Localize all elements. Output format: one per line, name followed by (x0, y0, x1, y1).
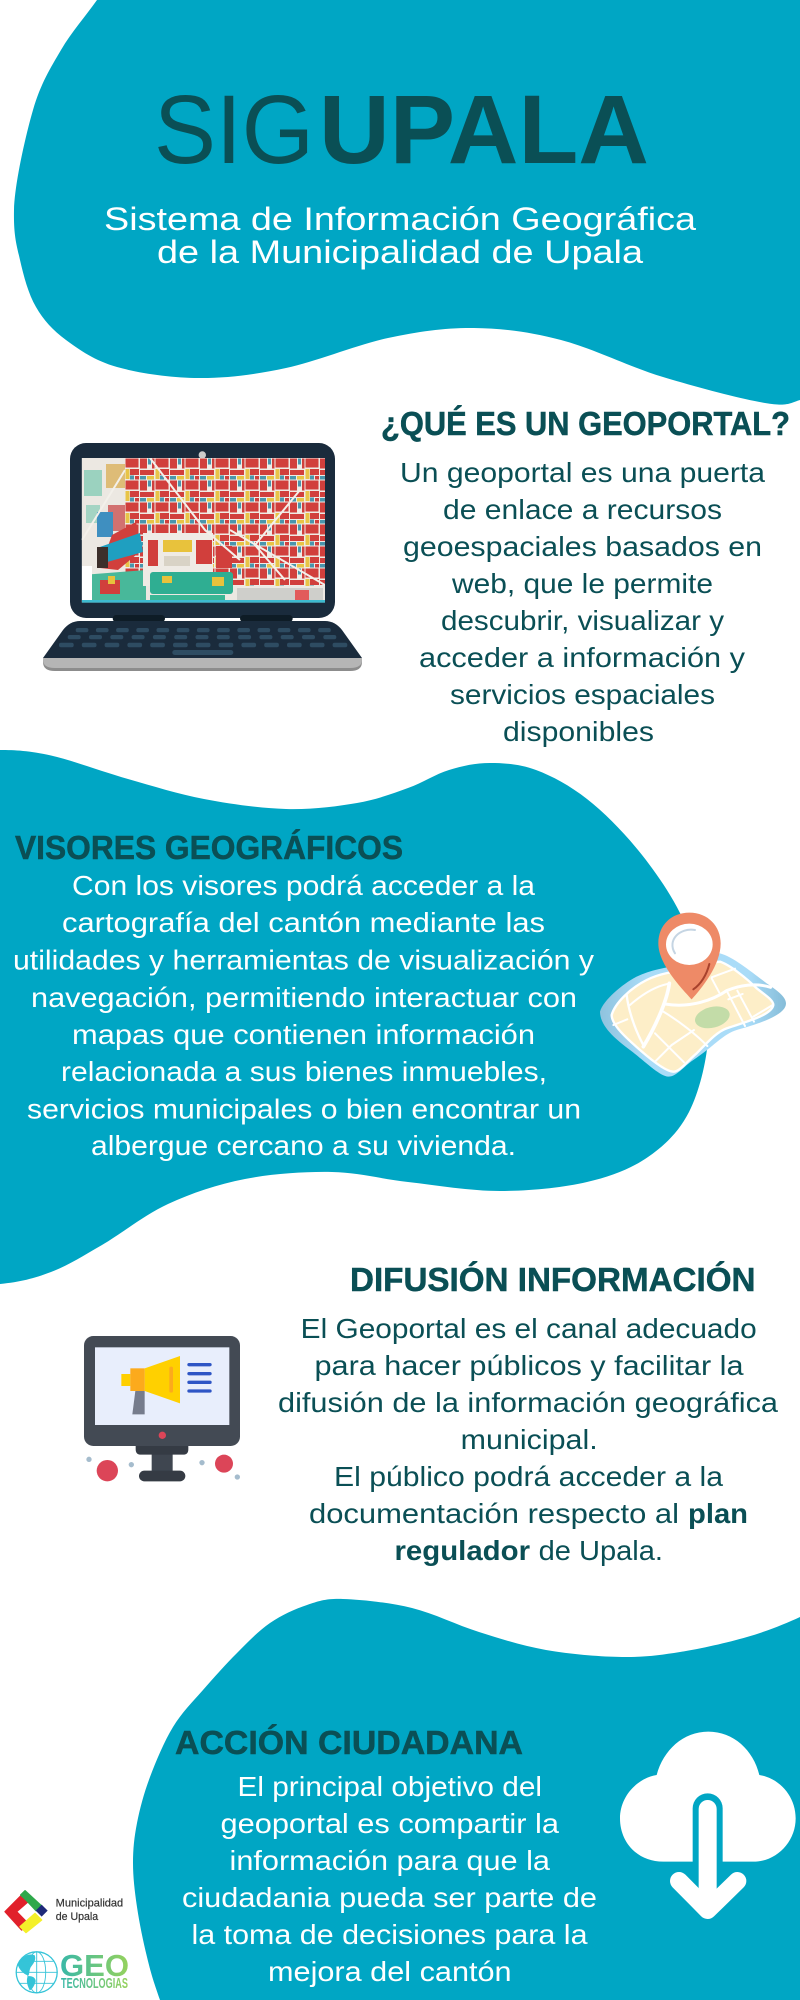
text block: difusion description: de Upala. (539, 1535, 663, 1566)
heading: accion ciudadana: ACCIÓN CIUDADANA (175, 1724, 523, 1761)
text block: difusion description: regulador (394, 1535, 530, 1566)
text block: geoportal definition: acceder a información y (419, 642, 745, 673)
logo: Geo Tecnologias: TECNOLOGIAS (61, 1975, 128, 1992)
icon: laptop with city map (43, 443, 362, 671)
logo: Municipalidad de Upala: Municipalidad (56, 1898, 123, 1910)
text block: accion description: la toma de decisiones para la (192, 1919, 588, 1950)
text block: geoportal definition: Un geoportal es una puerta (400, 457, 766, 488)
city map on screen (82, 458, 325, 603)
text block: accion description: información para que la (230, 1845, 551, 1876)
text block: difusion description: difusión de la información geográfica (278, 1387, 779, 1418)
title: SIG (154, 75, 314, 184)
text block: visores description: Con los visores podrá acceder a la (72, 870, 536, 901)
logo: Municipalidad de Upala: de Upala (56, 1911, 99, 1923)
text block: accion description (182, 1771, 597, 1987)
icon: cloud download (620, 1732, 796, 1910)
park (693, 1003, 732, 1032)
text block: visores description: servicios municipales o bien encontrar un (27, 1094, 581, 1124)
text block: difusion description: El Geoportal es el canal adecuado (301, 1313, 757, 1344)
panel: visores blob (0, 750, 708, 1284)
text block: visores description: albergue cercano a su vivienda. (91, 1130, 516, 1161)
text block: visores description: navegación, permitiendo interactuar con (31, 982, 577, 1013)
text block: visores description: utilidades y herramientas de visualización y (13, 944, 594, 976)
panel: accion ciudadana blob (133, 1599, 800, 2000)
text block: geoportal definition: servicios espaciales (450, 679, 715, 710)
icon: monitor with megaphone (84, 1336, 240, 1481)
text block: accion description: geoportal es compartir la (220, 1808, 560, 1839)
heading: visores geograficos: VISORES GEOGRÁFICOS (15, 829, 403, 866)
text block: geoportal definition: geoespaciales basados en (403, 531, 762, 562)
text block: geoportal definition: descubrir, visualizar y (441, 605, 724, 636)
text block: geoportal definition: web, que le permite (451, 568, 713, 599)
icon: map with location pin (600, 913, 786, 1077)
text block: geoportal definition: de enlace a recursos (443, 494, 722, 525)
text block: difusion description: plan (688, 1498, 748, 1529)
logo: Geo Tecnologias (16, 1948, 129, 1993)
globe (16, 1952, 57, 1993)
title: UPALA (319, 75, 649, 184)
panel: header blob (14, 0, 800, 405)
text block: difusion description: para hacer públicos y facilitar la (314, 1350, 744, 1381)
text block: difusion description (278, 1313, 779, 1566)
logo: Geo Tecnologias: GEO (60, 1948, 129, 1983)
text block: accion description: El principal objetivo del (238, 1771, 542, 1802)
text block: visores description: relacionada a sus bienes inmuebles, (61, 1056, 547, 1087)
text block: visores description (13, 870, 594, 1161)
text block: accion description: ciudadania pueda ser parte de (182, 1882, 597, 1913)
map roads (613, 969, 773, 1062)
subtitle: de la Municipalidad de Upala (157, 234, 643, 270)
text block: visores description: mapas que contienen información (72, 1019, 535, 1050)
pin (658, 913, 721, 999)
text block: geoportal definition: disponibles (503, 716, 654, 747)
text block: difusion description: municipal. (461, 1424, 598, 1455)
megaphone (121, 1356, 180, 1414)
text block: geoportal definition (400, 457, 766, 747)
subtitle (104, 201, 696, 270)
heading: difusion informacion: DIFUSIÓN INFORMACIÓN (350, 1261, 756, 1298)
text block: visores description: cartografía del cantón mediante las (62, 907, 545, 938)
logo: Municipalidad de Upala (5, 1891, 123, 1933)
text block: difusion description: El público podrá acceder a la (334, 1461, 724, 1492)
subtitle: Sistema de Información Geográfica (104, 201, 696, 237)
text block: accion description: mejora del cantón (268, 1956, 512, 1987)
title (154, 75, 649, 184)
text block: difusion description: documentación respecto al (309, 1498, 679, 1529)
